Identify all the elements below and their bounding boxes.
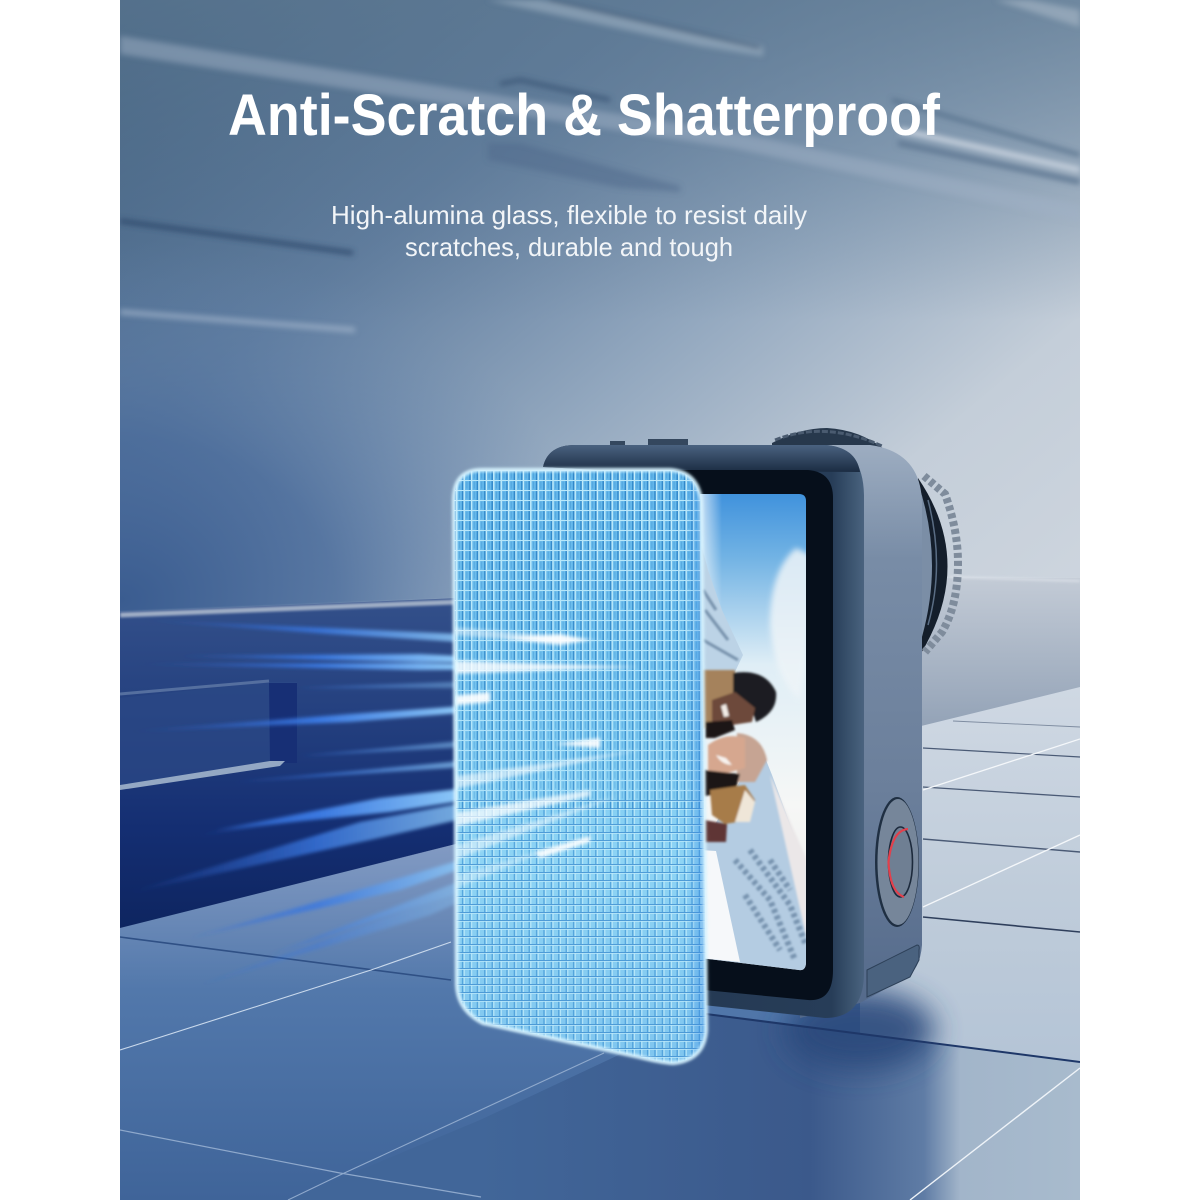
subtitle: High-alumina glass, flexible to resist daily xyxy=(331,200,807,230)
wall right of camera xyxy=(922,576,1080,726)
photo woman xyxy=(704,733,767,842)
camera xyxy=(543,428,958,1018)
camera top dial xyxy=(772,428,884,449)
camera screen glass xyxy=(676,470,833,1000)
camera body xyxy=(800,445,922,1018)
glass panel xyxy=(440,460,720,1080)
recessed wall xyxy=(120,598,460,928)
camera door xyxy=(867,945,919,997)
floor tile in front of camera xyxy=(120,937,1080,1200)
speed lines xyxy=(160,622,456,964)
floor left and bottom xyxy=(120,844,860,1200)
camera front frame xyxy=(543,445,864,1018)
subtitle: scratches, durable and tough xyxy=(405,232,733,262)
camera top buttons xyxy=(610,439,688,445)
subtitle xyxy=(331,200,807,262)
photo man xyxy=(700,670,776,738)
photo mountain bottom xyxy=(704,760,806,970)
photo mountain top xyxy=(702,556,743,672)
background: blurred interior xyxy=(0,0,1080,960)
camera record button xyxy=(875,797,919,927)
camera lens dial xyxy=(918,476,958,655)
camera screen photo xyxy=(695,490,810,975)
title: Anti-Scratch & Shatterproof xyxy=(228,83,941,148)
floor right xyxy=(860,687,1080,1066)
